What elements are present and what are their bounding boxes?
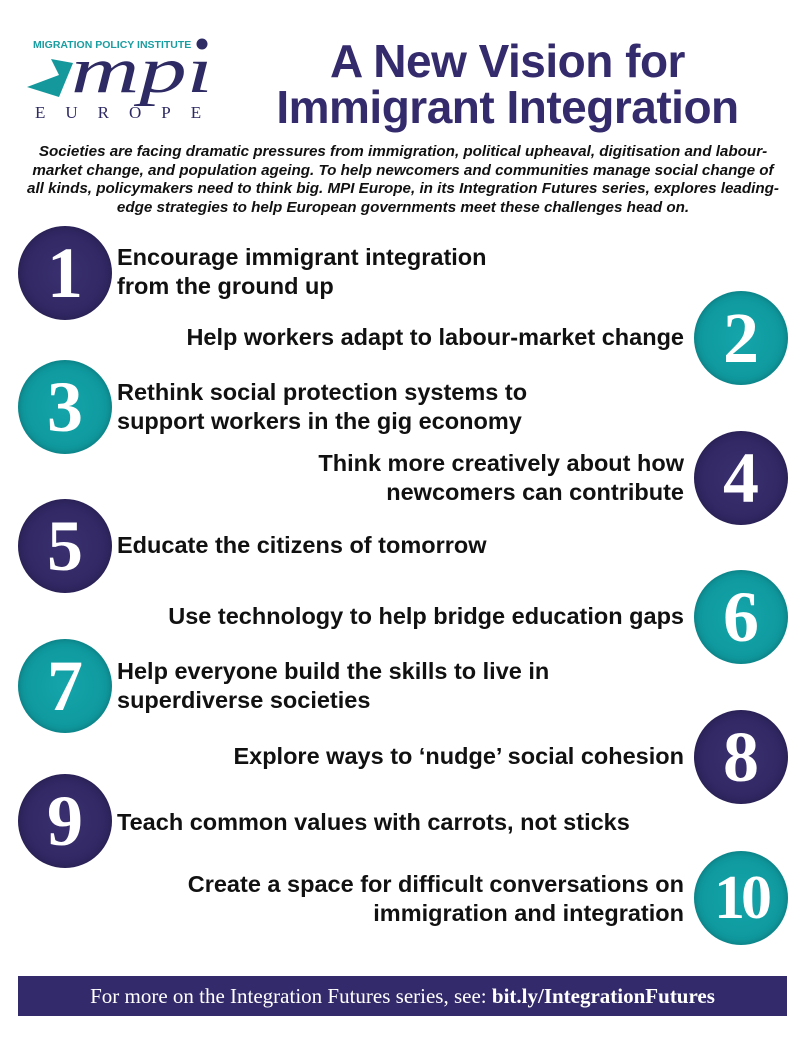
item 6: 6 <box>723 577 759 657</box>
item 5 <box>18 499 487 593</box>
item 5: Educate the citizens of tomorrow <box>117 532 487 558</box>
item 8: Explore ways to ‘nudge’ social cohesion <box>233 743 684 769</box>
title <box>276 35 739 133</box>
item 6: Use technology to help bridge education gaps <box>168 603 684 629</box>
item 5: 5 <box>47 506 83 586</box>
footer banner <box>18 976 787 1016</box>
item 8: 8 <box>723 717 759 797</box>
item 4: Think more creatively about how <box>318 450 684 476</box>
item 4: newcomers can contribute <box>386 479 684 505</box>
item 2 <box>186 291 788 385</box>
title: Immigrant Integration <box>276 81 739 133</box>
item 9: 9 <box>47 781 83 861</box>
item 2: Help workers adapt to labour-market change <box>186 324 684 350</box>
item 8 <box>233 710 788 804</box>
title: A New Vision for <box>330 35 685 87</box>
item 9 <box>18 774 630 868</box>
logo: MIGRATION POLICY INSTITUTE <box>33 39 191 51</box>
item 6 <box>168 570 788 664</box>
item 1: 1 <box>47 233 83 313</box>
item 7: 7 <box>47 646 83 726</box>
item 1: Encourage immigrant integration <box>117 244 487 270</box>
item 7: Help everyone build the skills to live in <box>117 658 549 684</box>
item 7: superdiverse societies <box>117 687 370 713</box>
item 10: Create a space for difficult conversations on <box>188 871 684 897</box>
item 1 <box>18 226 487 320</box>
item 10: immigration and integration <box>373 900 684 926</box>
logo: mpı <box>71 35 213 107</box>
item 1: from the ground up <box>117 273 334 299</box>
item 10: 10 <box>714 864 768 932</box>
item 3 <box>18 360 527 454</box>
item 7 <box>18 639 549 733</box>
item 2: 2 <box>723 298 759 378</box>
item 3: 3 <box>47 367 83 447</box>
footer banner: For more on the Integration Futures series, see: bit.ly/IntegrationFutures <box>90 984 715 1008</box>
item 4: 4 <box>723 438 759 518</box>
item 3: support workers in the gig economy <box>117 408 522 434</box>
item 9: Teach common values with carrots, not sticks <box>117 809 630 835</box>
intro text: Societies are facing dramatic pressures from immigration, political upheaval, digitisation and labour-market change, and population ageing. To help newcomers and communities manage social change of all kinds, policymakers need to think big. MPI Europe, in its Integration Futures series, explores leading-edge strategies to help European governments meet these challenges head on. <box>27 143 779 216</box>
item 10 <box>188 851 788 945</box>
logo <box>27 35 221 122</box>
item 4 <box>318 431 788 525</box>
item 3: Rethink social protection systems to <box>117 379 527 405</box>
logo: EUROPE <box>35 103 221 122</box>
